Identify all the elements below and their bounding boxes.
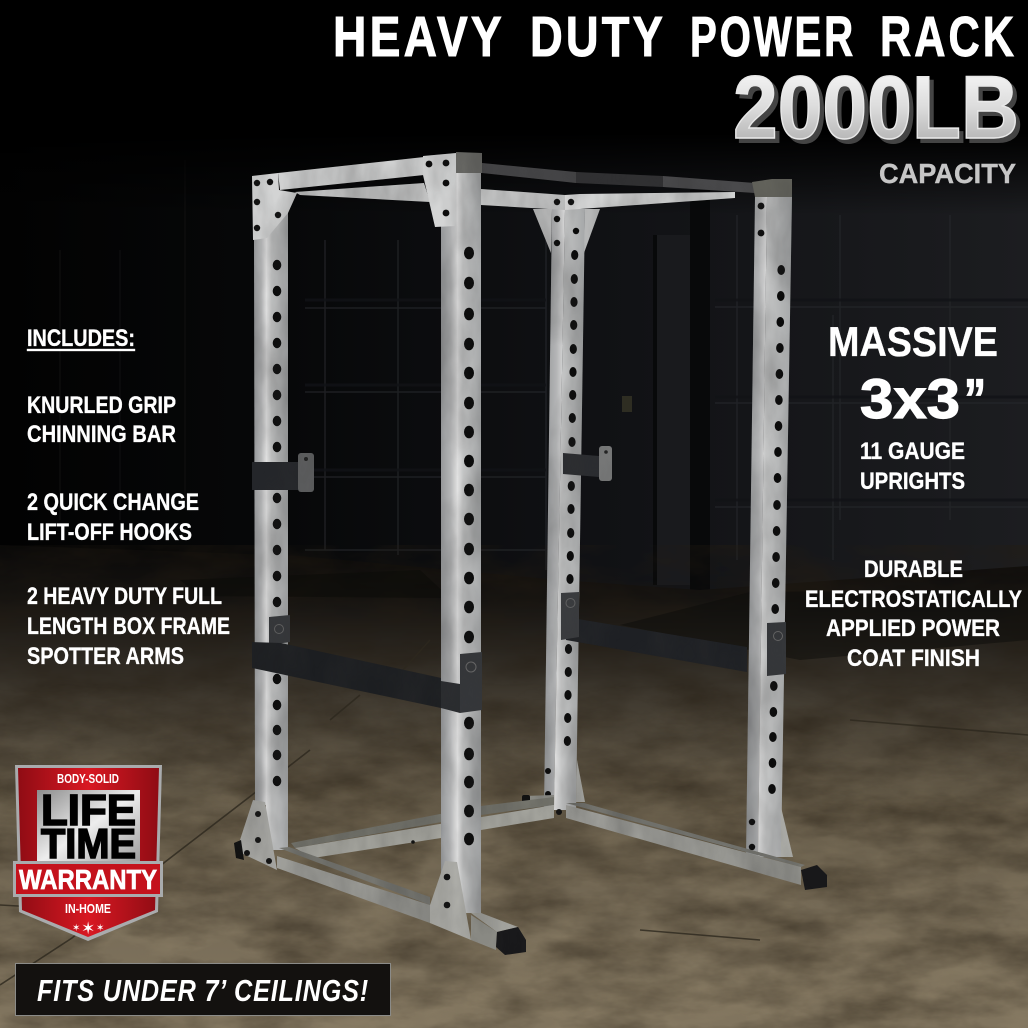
door panel lines, vertical channels and outlet	[60, 160, 1028, 590]
title	[333, 5, 1017, 69]
warranty badge	[13, 765, 163, 941]
shield	[15, 765, 162, 941]
front base foot cap	[496, 927, 526, 955]
item: lift-off hooks: LIFT-OFF HOOKS	[27, 519, 192, 546]
upright spec callout	[828, 318, 998, 495]
rear top rails	[481, 189, 735, 210]
gauge text: 11 GAUGE	[860, 438, 965, 465]
background: concrete floor	[0, 545, 1028, 1028]
lifetime panel	[37, 786, 140, 867]
3x3 size: ”	[964, 367, 986, 430]
power rack	[234, 152, 827, 955]
finish callout: APPLIED POWER	[826, 615, 1000, 642]
rear cross base rail	[291, 797, 554, 858]
rear lift-off hook	[563, 446, 612, 481]
top left rail	[252, 157, 430, 240]
stars: ✶	[81, 919, 95, 939]
title: DUTY	[530, 5, 666, 69]
includes list	[27, 325, 230, 670]
right base foot cap	[801, 865, 827, 890]
3x3 size: 3x3	[860, 367, 960, 430]
item: chinning bar: CHINNING BAR	[27, 421, 176, 448]
rear center upright	[533, 209, 600, 810]
brand text: BODY-SOLID	[57, 771, 119, 786]
ceiling height banner	[16, 964, 390, 1016]
stars	[72, 919, 104, 939]
item: spotter arms	[27, 583, 230, 670]
right upright	[746, 179, 793, 857]
chinning bar	[482, 163, 755, 193]
background: dark garage wall	[0, 0, 1028, 600]
front center upright	[423, 152, 482, 925]
finish callout	[805, 556, 1022, 672]
title: POWER	[690, 5, 856, 69]
stars: ✶	[96, 923, 104, 934]
in-home label: IN-HOME	[65, 901, 111, 916]
front left base rail	[277, 847, 518, 950]
front spotter arm	[252, 615, 482, 713]
item: chinning bar: KNURLED GRIP	[27, 392, 176, 419]
massive label: MASSIVE	[828, 318, 998, 365]
item: spotter arms: SPOTTER ARMS	[27, 643, 184, 670]
includes heading: INCLUDES:	[27, 325, 135, 352]
capacity label: CAPACITY	[879, 158, 1016, 189]
item: spotter arms: 2 HEAVY DUTY FULL	[27, 583, 222, 610]
right base rail	[522, 795, 805, 885]
finish callout: COAT FINISH	[847, 645, 980, 672]
left lift-off hook	[252, 453, 314, 492]
gauge text	[860, 438, 965, 495]
ceiling height banner: FITS UNDER 7’ CEILINGS!	[37, 973, 369, 1008]
item: lift-off hooks	[27, 489, 199, 546]
lifetime panel: TIME	[41, 820, 136, 867]
left upright	[234, 210, 288, 870]
finish callout: DURABLE	[864, 556, 963, 583]
item: chinning bar	[27, 392, 176, 448]
title: HEAVY	[333, 5, 505, 69]
lifetime panel: LIFE	[41, 786, 136, 835]
item: spotter arms: LENGTH BOX FRAME	[27, 613, 230, 640]
item: lift-off hooks: 2 QUICK CHANGE	[27, 489, 199, 516]
gauge text: UPRIGHTS	[860, 468, 965, 495]
rear spotter arm	[561, 592, 747, 672]
warranty band: WARRANTY	[19, 864, 157, 895]
stars: ✶	[72, 923, 80, 934]
